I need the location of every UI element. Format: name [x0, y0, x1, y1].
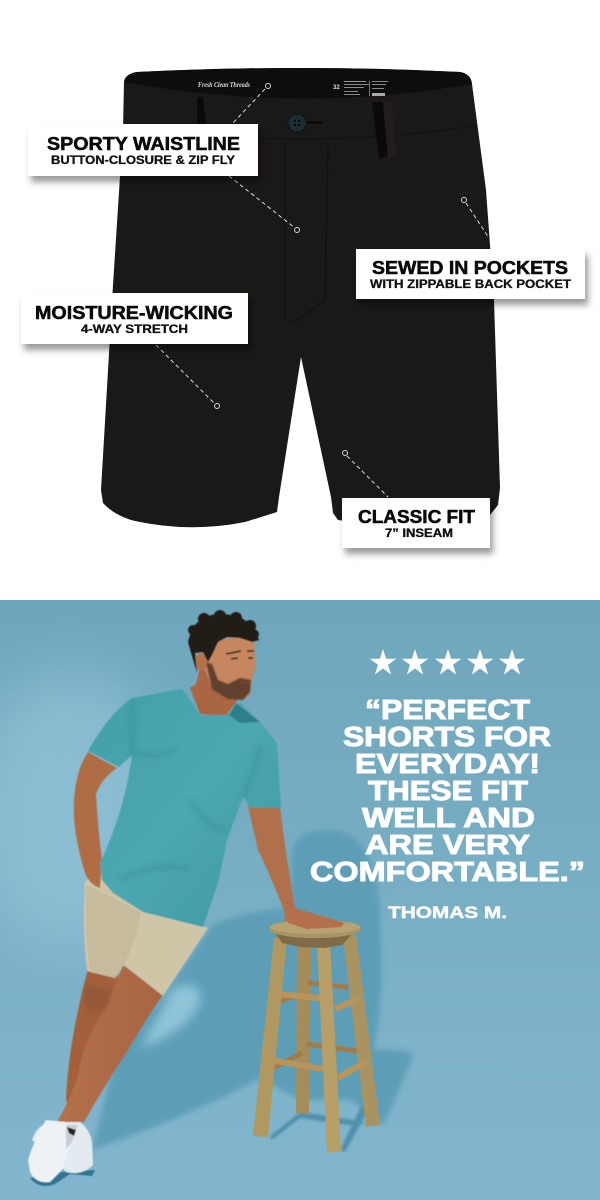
- beard: [206, 662, 251, 700]
- waistband size tag: [333, 81, 388, 96]
- front leg: [57, 965, 163, 1122]
- review quote: SHORTS FOR: [343, 721, 551, 752]
- review quote: EVERYDAY!: [355, 748, 540, 779]
- waistband size tag: 32: [333, 85, 340, 91]
- review quote: COMFORTABLE.”: [310, 856, 585, 887]
- khaki shorts: [84, 870, 208, 996]
- hand on stool: [284, 908, 345, 929]
- right leg: [343, 934, 380, 1127]
- left leg: [253, 938, 287, 1137]
- five stars: [370, 649, 525, 674]
- backdrop light patch: [0, 670, 170, 950]
- seat: [269, 920, 361, 938]
- shorts fold: [86, 885, 141, 978]
- panel: product shorts on white: [0, 0, 600, 600]
- seat top: [270, 920, 360, 934]
- wooden stool: [253, 920, 380, 1153]
- reviewer name: THOMAS M.: [388, 904, 507, 922]
- shirt shading: [120, 700, 262, 880]
- dashed callout lines and dots: [156, 84, 489, 497]
- shoes: [28, 1120, 93, 1182]
- front leg: [317, 941, 341, 1153]
- callout: classic fit: [342, 498, 490, 548]
- shorts garment: [101, 68, 500, 527]
- knee shading: [84, 985, 112, 1015]
- collar shadow: [229, 703, 260, 723]
- review quote: “PERFECT: [365, 694, 530, 725]
- callout: moisture-wicking: 4-WAY STRETCH: [81, 324, 188, 336]
- ear: [195, 653, 207, 671]
- mouth: [240, 682, 250, 684]
- back leg: [296, 945, 311, 1113]
- review quote: [310, 694, 585, 887]
- button: [287, 113, 323, 133]
- rear rungs: [273, 983, 357, 1068]
- stool leg floor shadows: [270, 1105, 368, 1152]
- man: [28, 610, 345, 1186]
- callout: sporty waistline: SPORTY WAISTLINE: [47, 133, 240, 154]
- waistband brand label: Fresh Clean Threads: [198, 81, 250, 89]
- t-shirt: [88, 689, 281, 927]
- callout: classic fit: CLASSIC FIT: [358, 506, 476, 527]
- wall and floor shadow: [92, 830, 414, 1152]
- callout: sewed in pockets: SEWED IN POCKETS: [372, 257, 568, 278]
- review quote: ARE VERY: [365, 829, 530, 860]
- callout: sewed in pockets: [356, 249, 585, 299]
- shoe shadow: [30, 1170, 95, 1186]
- callout: sewed in pockets: WITH ZIPPABLE BACK POCKET: [370, 279, 571, 291]
- face: [205, 637, 256, 700]
- eyes and brows: [226, 651, 254, 659]
- seat underside: [276, 934, 352, 948]
- review quote: WELL AND: [362, 802, 535, 833]
- front rungs: [270, 994, 365, 1078]
- waistband seam: [122, 126, 474, 139]
- fly seam: [285, 146, 328, 324]
- belt loops: [197, 97, 396, 158]
- callout: moisture-wicking: [21, 293, 248, 344]
- right arm: [248, 806, 345, 929]
- callout: sporty waistline: BUTTON-CLOSURE & ZIP FLY: [51, 155, 235, 167]
- callout: sporty waistline: [28, 124, 258, 176]
- waistband inner: [124, 68, 472, 99]
- callout: classic fit: 7” INSEAM: [385, 528, 453, 540]
- review quote: THESE FIT: [368, 775, 528, 806]
- neck: [190, 668, 245, 716]
- callout: moisture-wicking: MOISTURE-WICKING: [35, 302, 233, 323]
- back leg: [66, 965, 118, 1112]
- hair: [188, 610, 259, 673]
- light patch on wall: [140, 985, 201, 1048]
- left arm: [74, 752, 117, 888]
- panel: lifestyle review on blue backdrop: [0, 600, 600, 1200]
